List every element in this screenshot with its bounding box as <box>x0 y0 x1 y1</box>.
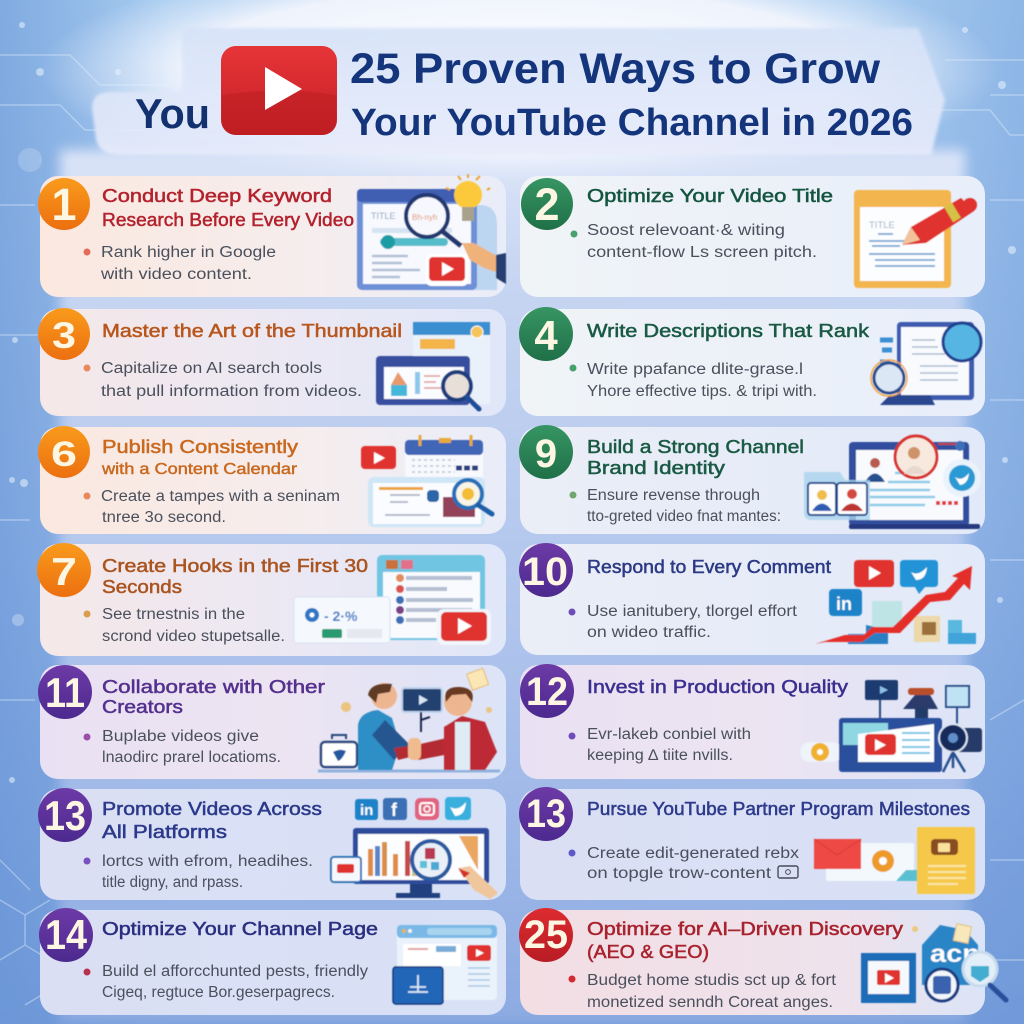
description <box>84 606 285 645</box>
description: title digny, and rpass. <box>102 874 243 891</box>
icon: social icons and analytics monitor: f <box>391 800 398 820</box>
number badge 10: 10 <box>522 550 568 594</box>
number badge 12: 12 <box>526 670 568 714</box>
number badge 10 <box>519 543 573 597</box>
description: Build el afforcchunted pests, friendly <box>102 963 368 980</box>
title banner <box>92 28 945 155</box>
heading: Promote Videos Across <box>102 799 322 819</box>
number badge 25: 25 <box>524 913 568 957</box>
icon: hook analytics window: - 2·% <box>324 608 358 624</box>
heading: Build a Strong Channel <box>587 437 804 457</box>
number badge 9: 9 <box>535 432 557 476</box>
description <box>570 361 817 400</box>
heading: Write Descriptions That Rank <box>587 321 870 341</box>
description <box>568 726 751 764</box>
title: You label: You <box>135 90 210 137</box>
panel: tip 25 <box>519 908 1006 1015</box>
description: tnree 3o second. <box>102 509 226 526</box>
heading <box>101 437 298 478</box>
number badge 3: 3 <box>52 315 76 356</box>
icon: thumbnail editor windows <box>376 322 490 409</box>
heading: Brand Identity <box>587 458 725 478</box>
description: keeping ∆ tiite nvills. <box>587 747 733 764</box>
description: scrond video stupetsalle. <box>102 628 285 645</box>
description: monetized senndh Coreat anges. <box>587 994 833 1011</box>
icon: title document with pencil: TITLE <box>869 220 895 231</box>
number badge 4 <box>519 307 573 361</box>
description: tto-greted video fnat mantes: <box>587 508 781 525</box>
description: Write ppafance dlite-grase.l <box>587 361 803 378</box>
title line 2: Your YouTube Channel in 2026 <box>351 102 913 144</box>
heading: Seconds <box>102 577 182 597</box>
number badge 2 <box>521 178 573 230</box>
heading: Conduct Deep Keyword <box>102 186 332 206</box>
icon: hook analytics window <box>294 555 491 645</box>
heading: All Platforms <box>102 822 227 842</box>
description: with video content. <box>100 266 252 283</box>
description: on topgle trow-content <box>587 865 772 882</box>
heading <box>587 919 903 962</box>
heading: (AEO & GEO) <box>587 942 709 962</box>
heading: Collaborate with Other <box>102 677 325 697</box>
panel: tip 13 partner program <box>519 787 985 900</box>
panel: tip 6 <box>38 426 506 534</box>
icon: social icons and analytics monitor <box>331 797 498 899</box>
panel: tip 14 <box>39 908 506 1015</box>
description <box>84 244 276 283</box>
icon: brand laptop with profiles <box>804 436 981 529</box>
number badge 3 <box>38 308 90 360</box>
heading: Master the Art of the Thumbnail <box>102 321 402 341</box>
number badge 7 <box>37 543 91 597</box>
panel: tip 10 <box>519 543 985 655</box>
number badge 13 <box>519 787 573 841</box>
heading: Invest in Production Quality <box>587 677 848 697</box>
heading: Optimize for AI–Driven Discovery <box>587 919 903 939</box>
title line 1: 25 Proven Ways to Grow <box>350 45 881 93</box>
description <box>568 972 837 1011</box>
icon: AI discovery screen and magnifiers: acp <box>930 940 980 968</box>
panel: tip 7 <box>37 543 506 656</box>
icon: milestone envelope and document <box>814 827 975 894</box>
description <box>84 488 340 526</box>
heading <box>102 799 322 842</box>
heading: Research Before Every Video <box>102 210 354 230</box>
number badge 9 <box>519 425 573 479</box>
description <box>568 603 798 641</box>
description: content-flow Ls screen pitch. <box>587 244 817 261</box>
panel: tip 1 <box>38 174 506 297</box>
description <box>84 963 368 1001</box>
number badge 11: 11 <box>45 669 85 716</box>
panel: tip 4 <box>519 307 985 416</box>
panel: tip 2 <box>520 176 985 297</box>
description <box>570 487 781 525</box>
number badge 25 <box>519 908 573 962</box>
description: on wideo traffic. <box>587 624 711 641</box>
panel: tip 3 <box>38 308 506 416</box>
number badge 1: 1 <box>51 179 77 230</box>
description <box>570 222 817 261</box>
panel: tip 9 <box>519 425 985 534</box>
description: lnaodirc prarel locatioms. <box>102 749 281 766</box>
description: Use ianitubery, tlorgel effort <box>587 603 798 620</box>
description: Ensure revense through <box>587 487 760 504</box>
heading: Create Hooks in the First 30 <box>102 556 368 576</box>
heading: Publish Consistently <box>102 437 298 457</box>
number badge 12 <box>520 664 574 718</box>
number badge 6 <box>38 426 90 478</box>
icon: title document with pencil <box>854 190 977 288</box>
icon: channel page window and tablet <box>393 925 497 1004</box>
icon: browser with magnifier, bulb and hand: TITLE <box>371 211 396 221</box>
heading: Creators <box>102 697 183 717</box>
description: Rank higher in Google <box>101 244 276 261</box>
description <box>84 853 313 891</box>
number badge 14: 14 <box>45 911 88 958</box>
description: that pull information from videos. <box>101 383 362 400</box>
heading <box>102 677 325 717</box>
icon: social growth arrow <box>815 560 976 644</box>
number badge 7: 7 <box>51 551 77 594</box>
description: Evr-lakeb conbiel with <box>587 726 751 743</box>
description: Cigeq, regtuce Bor.geserpagrecs. <box>102 984 335 1001</box>
icon: content calendar <box>361 435 492 527</box>
heading: Optimize Your Video Title <box>587 186 833 206</box>
number badge 13: 13 <box>526 792 566 836</box>
heading: with a Content Calendar <box>101 461 298 478</box>
description: Yhore effective tips. & tripi with. <box>587 383 817 400</box>
description: See trnestnis in the <box>102 606 245 623</box>
icon: AI discovery screen and magnifiers <box>861 924 1006 1003</box>
icon: browser with magnifier, bulb and hand <box>357 174 506 290</box>
description: Soost relevoant·& witing <box>587 222 785 239</box>
heading: Optimize Your Channel Page <box>102 919 378 939</box>
icon: social growth arrow: in <box>836 594 852 614</box>
description <box>84 728 281 766</box>
description: Buplabe videos give <box>102 728 259 745</box>
description <box>568 845 799 882</box>
description: Budget home studis sct up & fort <box>587 972 837 989</box>
number badge 1 <box>38 178 90 230</box>
icon: YouTube play logo <box>221 46 337 135</box>
icon: two creators shaking hands <box>318 668 500 771</box>
number badge 4: 4 <box>534 312 558 359</box>
description: Create edit-generated rebx <box>587 845 799 862</box>
heading: Pursue YouTube Partner Program Milestones <box>587 799 970 819</box>
panel: tip 12 <box>520 664 985 779</box>
icon: monitor with globe and magnifier <box>871 322 981 405</box>
panel: tip 11 <box>38 665 506 779</box>
number badge 13: 13 <box>44 792 86 839</box>
panel: tip 13 promote <box>38 788 506 900</box>
number badge 2: 2 <box>534 179 560 230</box>
number badge 6: 6 <box>51 435 77 474</box>
icon: browser with magnifier, bulb and hand: Bh-nyh <box>412 213 437 222</box>
heading <box>587 437 804 478</box>
heading <box>102 186 354 230</box>
icon: social icons and analytics monitor: in <box>360 802 373 819</box>
description: Capitalize on AI search tools <box>101 360 322 377</box>
description: Create a tampes with a seninam <box>101 488 340 505</box>
heading: Respond to Every Comment <box>587 557 831 577</box>
description <box>84 360 362 400</box>
heading <box>102 556 368 597</box>
description: lortcs with efrom, headihes. <box>102 853 313 870</box>
icon: studio equipment <box>800 680 982 772</box>
